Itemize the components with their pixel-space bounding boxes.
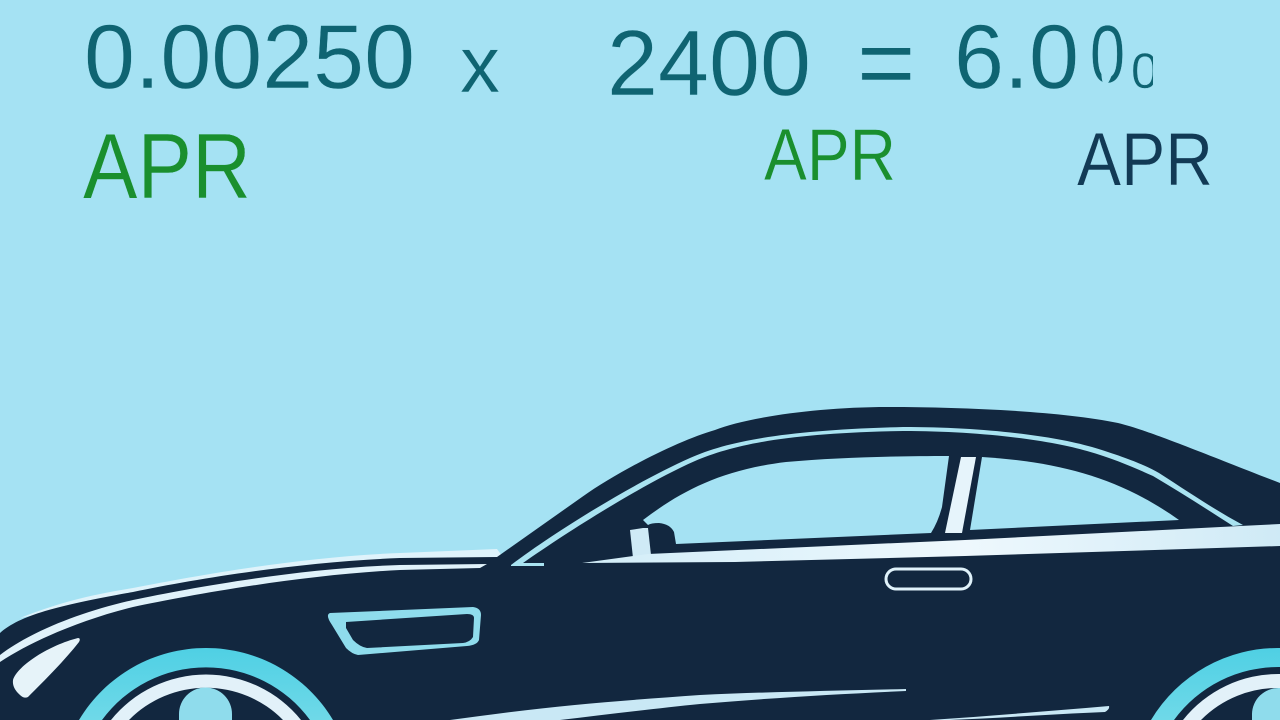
result: partly faded digit: 0 — [1090, 9, 1125, 100]
lower body stripe — [450, 689, 906, 720]
formula — [83, 24, 1210, 198]
hood highlight — [20, 549, 505, 618]
APR label: right: APR — [1077, 117, 1213, 201]
result: faded digit fragment: 0 — [1131, 43, 1159, 99]
belt line — [582, 524, 1280, 563]
side vent — [328, 607, 481, 655]
APR label: left: APR — [83, 114, 251, 218]
equals sign: = — [857, 7, 915, 119]
sill stripe — [930, 706, 1109, 720]
roof trim line — [511, 427, 1243, 566]
front wheel spoke — [179, 688, 232, 720]
number: 2400: 2400 — [607, 11, 811, 115]
result: 6.0: 6.0 — [954, 7, 1079, 108]
rear side window — [970, 457, 1179, 530]
side mirror — [630, 528, 651, 558]
number: 0.00250: 0.00250 — [84, 7, 415, 108]
rear wheel — [1151, 648, 1280, 720]
door pillar — [945, 457, 976, 533]
car body — [0, 407, 1280, 720]
APR label: middle: APR — [764, 115, 896, 196]
hood stripe — [0, 564, 487, 662]
multiply sign: x — [460, 20, 500, 109]
rear wheel rim ring — [1151, 648, 1280, 720]
rear wheel inner ring — [1183, 674, 1280, 720]
car — [0, 407, 1280, 720]
front wheel inner ring — [111, 675, 301, 720]
headlight — [13, 638, 80, 698]
rear wheel spoke — [1252, 688, 1280, 720]
door handle — [886, 569, 971, 589]
front wheel — [79, 648, 333, 720]
front side window — [643, 456, 949, 544]
front wheel rim ring — [79, 648, 333, 720]
